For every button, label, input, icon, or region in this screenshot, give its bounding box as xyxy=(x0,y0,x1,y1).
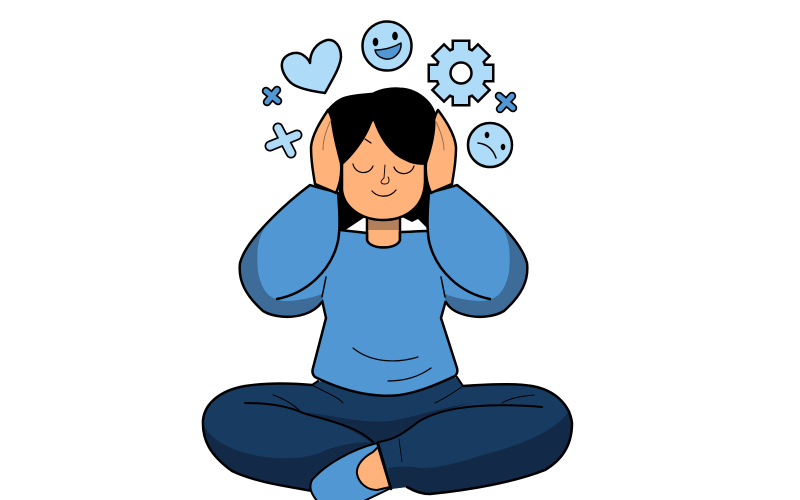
face xyxy=(342,110,425,220)
nose xyxy=(381,165,389,184)
right leg xyxy=(378,384,572,494)
foot xyxy=(310,443,391,500)
icon: small cross left xyxy=(266,90,278,102)
left eye xyxy=(353,164,373,173)
front hair xyxy=(326,88,437,164)
mouth xyxy=(372,190,396,196)
hip shadow xyxy=(300,403,470,443)
right eye xyxy=(394,166,414,174)
neck xyxy=(367,212,400,248)
right hand xyxy=(426,110,456,193)
icon: small cross right xyxy=(499,96,513,109)
left arm sleeve xyxy=(240,185,339,317)
left hand xyxy=(311,110,341,193)
sweater torso xyxy=(312,230,457,396)
eyebrow xyxy=(365,139,371,143)
left leg xyxy=(203,384,378,491)
waistband and hip xyxy=(300,377,470,443)
back hair xyxy=(337,160,431,232)
icon: gear xyxy=(430,42,492,104)
icon: large cross xyxy=(270,128,297,153)
legs xyxy=(203,377,572,500)
icon: heart xyxy=(282,40,341,93)
cuff edge xyxy=(378,443,391,489)
right arm sleeve xyxy=(428,185,527,317)
icon: happy face xyxy=(362,22,412,70)
icon: sad face xyxy=(468,123,512,167)
